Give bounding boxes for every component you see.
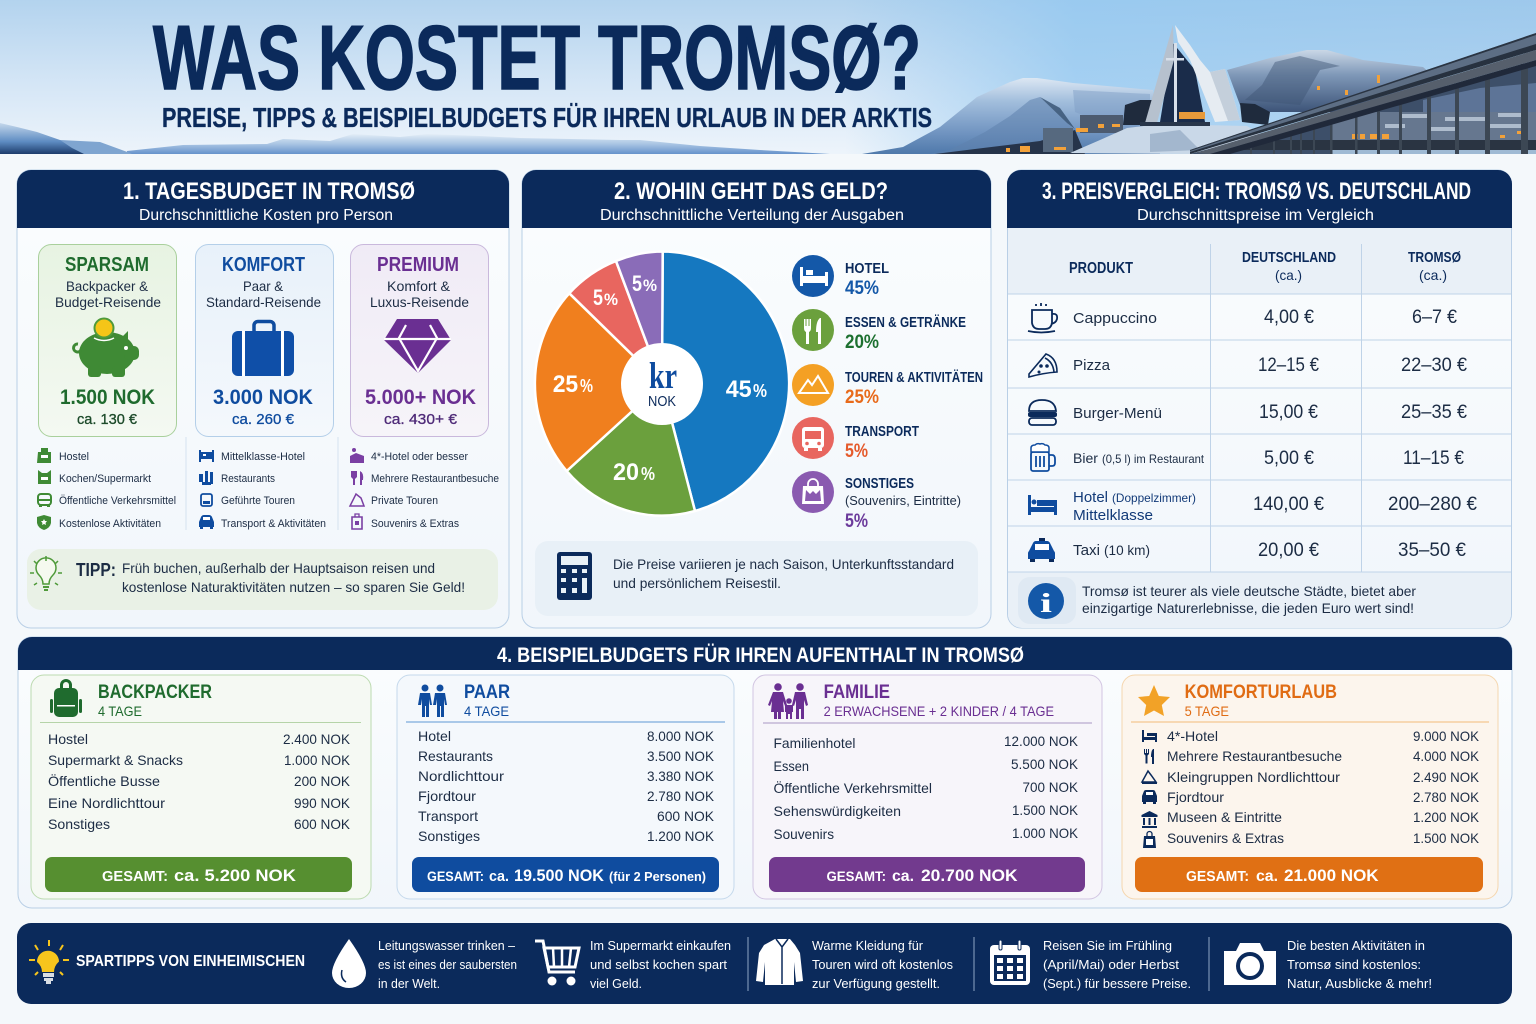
- legend: Essen: [792, 309, 966, 353]
- icon: bridge: [1190, 33, 1536, 154]
- card: Paar: Hotel: [418, 728, 451, 744]
- total: Familie: ca.: [892, 868, 914, 885]
- row: Hotel: 140,00 €: [1253, 494, 1324, 515]
- pie chart: NOK: [648, 394, 676, 410]
- tip: Supermarkt: Im Supermarkt einkaufen: [590, 938, 731, 953]
- left mountains: [0, 123, 830, 154]
- legend: Hotel: HOTEL: [845, 261, 889, 277]
- legend: Transport: TRANSPORT: [845, 424, 919, 440]
- card: Premium: Komfort &: [387, 278, 451, 294]
- callout: Preishinweis: und persönlichem Reisestil.: [613, 575, 781, 591]
- footer: Spartipps: [17, 923, 1512, 1004]
- tip: Reisezeit: (Sept.) für bessere Preise.: [1043, 976, 1191, 991]
- card: Familie: 700 NOK: [1022, 779, 1079, 795]
- card: Premium: PREMIUM: [377, 254, 459, 276]
- card: Premium: ca. 430+ €: [384, 411, 458, 428]
- card: Backpacker: 2.400 NOK: [283, 731, 351, 747]
- icon: water drop: [332, 939, 366, 988]
- card: Familie: Souvenirs: [774, 826, 834, 842]
- pie chart: %: [643, 276, 657, 295]
- title: WAS KOSTET TROMSØ?: [153, 8, 921, 109]
- card: Komfort: KOMFORT: [222, 254, 305, 276]
- subtitle: PREISE, TIPPS & BEISPIELBUDGETS FÜR IHREN URLAUB IN DER ARKTIS: [162, 102, 932, 133]
- tip: Aktivitäten: Die besten Aktivitäten in: [1287, 938, 1425, 953]
- icons: Komforturlaub rows: [1142, 730, 1158, 848]
- total: Komforturlaub: 21.000 NOK: [1284, 866, 1379, 885]
- total: Komforturlaub: ca.: [1256, 868, 1278, 885]
- callout: Info: [1018, 577, 1416, 624]
- card: Komforturlaub: Mehrere Restaurantbesuche: [1167, 748, 1342, 764]
- pie chart: [535, 252, 789, 516]
- legend: Transport: 5%: [845, 441, 868, 462]
- callout: Info: einzigartige Naturerlebnisse, die jeden Euro wert sind!: [1082, 600, 1414, 616]
- card: Komforturlaub: Kleingruppen Nordlichttour: [1167, 769, 1340, 785]
- card: Sparsam: Budget-Reisende: [55, 294, 161, 310]
- row: Pizza: Pizza: [1073, 357, 1111, 374]
- row: Taxi: 20,00 €: [1258, 540, 1319, 561]
- tip: Supermarkt: [535, 938, 731, 991]
- card: Komforturlaub: Museen & Eintritte: [1167, 809, 1282, 825]
- list: Premium: 4*-Hotel oder besser: [371, 451, 468, 463]
- card: Komforturlaub: Souvenirs & Extras: [1167, 830, 1284, 846]
- card: Backpacker: 200 NOK: [294, 773, 351, 789]
- legend: Sonstiges: 5%: [845, 511, 868, 532]
- row: Taxi: 35–50 €: [1398, 540, 1466, 561]
- icon: family: [768, 683, 808, 719]
- pie chart: %: [604, 290, 618, 309]
- callout: Tipp: [27, 549, 498, 610]
- icons: Premium list: [350, 448, 364, 529]
- card: Komforturlaub: 4*-Hotel: [1167, 728, 1218, 744]
- card: Paar: 2.780 NOK: [647, 788, 715, 804]
- tip: Reisezeit: (April/Mai) oder Herbst: [1043, 957, 1179, 972]
- card: Paar: [397, 675, 734, 899]
- row: Hotel: [1028, 489, 1477, 524]
- list: Sparsam: Kostenlose Aktivitäten: [59, 518, 161, 530]
- panel: Ausgabenverteilung: [522, 170, 991, 628]
- card: Premium: 5.000+ NOK: [365, 386, 476, 409]
- header banner: [0, 0, 1536, 154]
- icon: arctic cathedral: [1070, 25, 1270, 154]
- card: Komforturlaub: 2.490 NOK: [1413, 769, 1480, 785]
- card: Komfort: Paar &: [243, 278, 284, 294]
- panel: Preisvergleich: [1007, 170, 1512, 628]
- callout: Tipp: kostenlose Naturaktivitäten nutzen – so sparen Sie Geld!: [122, 579, 465, 595]
- row: Taxi: Taxi: [1073, 542, 1100, 559]
- card: Backpacker: 600 NOK: [294, 816, 351, 832]
- total: Paar: GESAMT:: [427, 868, 484, 884]
- card: Backpacker: 4 TAGE: [98, 703, 142, 719]
- row: Cappuccino: [1028, 303, 1457, 332]
- list: Komfort: Geführte Touren: [221, 495, 295, 507]
- row: Hotel: Mittelklasse: [1073, 507, 1153, 524]
- pie chart: 5: [632, 271, 642, 296]
- tip: Warme Kleidung: zur Verfügung gestellt.: [812, 976, 940, 991]
- pie chart: %: [753, 381, 767, 401]
- list: Komfort: Mittelklasse-Hotel: [221, 451, 305, 463]
- card: Backpacker: Sonstiges: [48, 816, 110, 832]
- row: Taxi: (10 km): [1104, 543, 1150, 558]
- callout: Tipp: TIPP:: [76, 560, 116, 580]
- card: Komforturlaub: 5 TAGE: [1185, 703, 1229, 719]
- row: Hotel: Hotel: [1073, 489, 1108, 506]
- total: Paar: ca.: [489, 868, 509, 885]
- card: Backpacker: 990 NOK: [294, 795, 351, 811]
- subheading: Durchschnittliche Kosten pro Person: [139, 207, 393, 224]
- card: Backpacker: Hostel: [48, 731, 88, 747]
- icon: town lights: [935, 100, 1152, 154]
- table header: PRODUKT: [1069, 260, 1133, 277]
- pie chart: 45: [726, 376, 752, 403]
- table: price comparison: [1008, 244, 1511, 572]
- callout: Preishinweis: Die Preise variieren je nach Saison, Unterkunftsstandard: [613, 556, 954, 572]
- total: Familie: GESAMT:: [826, 868, 886, 884]
- callout: Preishinweis: [535, 541, 978, 616]
- card: Komforturlaub: 4.000 NOK: [1413, 748, 1480, 764]
- list: Sparsam: Öffentliche Verkehrsmittel: [59, 495, 176, 507]
- card: Komforturlaub: Fjordtour: [1167, 789, 1224, 805]
- pie chart: kr: [649, 356, 677, 397]
- pie chart: 25: [553, 371, 578, 398]
- card: Familie: Sehenswürdigkeiten: [774, 803, 901, 819]
- card: Backpacker: 1.000 NOK: [284, 752, 351, 768]
- card: Komfort: 3.000 NOK: [213, 386, 313, 409]
- icon: suitcase: [232, 322, 294, 376]
- card: Komforturlaub: [1122, 675, 1498, 899]
- pie chart: %: [641, 464, 655, 484]
- table header: (ca.): [1419, 267, 1447, 283]
- row: Bier: 11–15 €: [1403, 448, 1464, 469]
- card: Familie: 12.000 NOK: [1004, 733, 1079, 749]
- icon: camera: [1224, 943, 1276, 985]
- card: Backpacker: BACKPACKER: [98, 681, 212, 703]
- row: Bier: 5,00 €: [1264, 448, 1314, 469]
- card: Paar: Restaurants: [418, 748, 493, 764]
- legend: Essen: ESSEN & GETRÄNKE: [845, 314, 966, 331]
- card: Sparsam: [38, 244, 176, 436]
- icon: light bulb: [30, 556, 62, 590]
- total: Backpacker: GESAMT:: [102, 869, 168, 885]
- tip: Reisezeit: Reisen Sie im Frühling: [1043, 938, 1172, 953]
- legend: Essen: 20%: [845, 332, 879, 353]
- card: Familie: [753, 675, 1102, 899]
- card: Familie: 1.500 NOK: [1012, 802, 1079, 818]
- card: Komforturlaub: 1.500 NOK: [1413, 830, 1480, 846]
- card: Paar: Sonstiges: [418, 828, 480, 844]
- icons: Sparsam list: [37, 448, 51, 530]
- icon: calculator: [557, 552, 592, 600]
- icon: couple: [418, 684, 447, 717]
- row: Burger: 15,00 €: [1259, 402, 1318, 423]
- legend: Touren: [792, 364, 983, 408]
- tip: Warme Kleidung: Touren wird oft kostenlos: [812, 957, 953, 972]
- legend: Hotel: [792, 255, 889, 299]
- heading: Wohin geht das Geld: 2. WOHIN GEHT DAS GELD?: [614, 178, 888, 205]
- card: Familie: Essen: [774, 758, 809, 774]
- row: Pizza: 22–30 €: [1401, 355, 1467, 376]
- card: Komfort: ca. 260 €: [232, 411, 295, 428]
- row: Pizza: [1029, 354, 1467, 377]
- card: Premium: [350, 244, 488, 436]
- total: Backpacker: [45, 857, 352, 892]
- list: Premium: Private Touren: [371, 495, 438, 507]
- list: Sparsam: Hostel: [59, 451, 89, 463]
- tip: Aktivitäten: Natur, Ausblicke & mehr!: [1287, 976, 1432, 991]
- subheading: Durchschnittliche Verteilung der Ausgaben: [600, 207, 904, 224]
- icon: info: i: [1040, 588, 1053, 618]
- card: Backpacker: Eine Nordlichttour: [48, 795, 165, 811]
- card: Sparsam: 1.500 NOK: [60, 386, 155, 409]
- callout: Tipp: Früh buchen, außerhalb der Hauptsaison reisen und: [122, 560, 435, 576]
- row: Burger: 25–35 €: [1401, 402, 1467, 423]
- table header: [1069, 249, 1461, 283]
- tip: Supermarkt: und selbst kochen spart: [590, 957, 727, 972]
- card: Familie: 5.500 NOK: [1011, 756, 1079, 772]
- card: Sparsam: Backpacker &: [66, 278, 149, 294]
- row: Cappuccino: 6–7 €: [1412, 307, 1457, 328]
- icon: bulb: [29, 940, 69, 984]
- icon: diamond: [384, 319, 451, 373]
- tip: Leitungswasser: es ist eines der saubersten: [378, 957, 517, 972]
- pie chart: 20: [613, 459, 639, 486]
- row: Cappuccino: Cappuccino: [1073, 310, 1157, 327]
- row: Bier: (0,5 l) im Restaurant: [1102, 452, 1205, 466]
- list: Sparsam: Kochen/Supermarkt: [59, 473, 151, 485]
- icon: info: [1028, 583, 1064, 619]
- card: Paar: Transport: [418, 808, 478, 824]
- icons: Komfort list: [199, 450, 214, 529]
- legend: Sonstiges: (Souvenirs, Eintritte): [845, 493, 961, 508]
- row: Hotel: (Doppelzimmer): [1112, 491, 1196, 505]
- row: Pizza: 12–15 €: [1258, 355, 1319, 376]
- total: Komforturlaub: [1135, 857, 1483, 892]
- icon: backpack: [50, 679, 82, 717]
- tip: Aktivitäten: Tromsø sind kostenlos:: [1287, 957, 1421, 972]
- card: Paar: 1.200 NOK: [647, 828, 715, 844]
- icon: shopping cart: [535, 941, 579, 986]
- card: Familie: FAMILIE: [824, 681, 890, 703]
- legend: Sonstiges: [792, 471, 961, 532]
- row: Bier: [1031, 444, 1464, 471]
- icon: calendar: [990, 940, 1030, 985]
- table header: (ca.): [1275, 267, 1302, 283]
- pie chart: %: [580, 376, 593, 396]
- footer: Spartipps: SPARTIPPS VON EINHEIMISCHEN: [76, 953, 305, 970]
- card: Sparsam: ca. 130 €: [77, 411, 138, 428]
- list: Premium: Souvenirs & Extras: [371, 518, 459, 530]
- card: Komforturlaub: 9.000 NOK: [1413, 728, 1480, 744]
- list: Premium: Mehrere Restaurantbesuche: [371, 473, 499, 485]
- right mountains: [862, 50, 1450, 154]
- table header: DEUTSCHLAND: [1242, 249, 1336, 266]
- row: Burger: [1028, 400, 1467, 425]
- card: Paar: PAAR: [464, 681, 510, 703]
- total: Backpacker: ca. 5.200 NOK: [174, 866, 297, 885]
- heading: Tagesbudget: 1. TAGESBUDGET IN TROMSØ: [123, 178, 415, 205]
- card: Familie: Öffentliche Verkehrsmittel: [774, 779, 932, 796]
- total: Familie: [769, 857, 1085, 892]
- card: Familie: 2 ERWACHSENE + 2 KINDER / 4 TAGE: [824, 703, 1054, 719]
- icon: star: [1138, 685, 1170, 716]
- card: Premium: Luxus-Reisende: [370, 294, 469, 310]
- total: Paar: 19.500 NOK: [514, 866, 605, 885]
- card: Paar: 600 NOK: [657, 808, 715, 824]
- card: Komforturlaub: 1.200 NOK: [1413, 809, 1480, 825]
- card: Backpacker: Supermarkt & Snacks: [48, 752, 183, 768]
- subheading: Durchschnittspreise im Vergleich: [1137, 207, 1374, 224]
- panel: Tagesbudget: [17, 170, 509, 628]
- callout: Info: Tromsø ist teurer als viele deutsche Städte, bietet aber: [1082, 583, 1416, 599]
- card: Familie: 1.000 NOK: [1012, 825, 1079, 841]
- card: Paar: 4 TAGE: [464, 703, 509, 719]
- total: Paar: [412, 857, 719, 892]
- legend: Touren: TOUREN & AKTIVITÄTEN: [845, 369, 983, 386]
- tip: Supermarkt: viel Geld.: [590, 976, 642, 991]
- total: Komforturlaub: GESAMT:: [1186, 869, 1249, 885]
- list: Komfort: [199, 450, 326, 530]
- card: Paar: 3.380 NOK: [647, 768, 715, 784]
- card: Komforturlaub: 2.780 NOK: [1413, 789, 1480, 805]
- tip: Leitungswasser: [332, 938, 517, 991]
- total: Paar: (für 2 Personen): [609, 869, 706, 884]
- row: Bier: Bier: [1073, 450, 1098, 466]
- card: Backpacker: [31, 675, 371, 899]
- card: Paar: 3.500 NOK: [647, 748, 715, 764]
- tip: Warme Kleidung: Warme Kleidung für: [812, 938, 924, 953]
- card: Sparsam: SPARSAM: [65, 254, 149, 276]
- row: Burger: Burger-Menü: [1073, 405, 1162, 422]
- total: Familie: 20.700 NOK: [921, 866, 1018, 885]
- legend: Transport: [792, 417, 919, 462]
- card: Komfort: Standard-Reisende: [206, 294, 321, 310]
- list: Premium: [350, 448, 499, 530]
- row: Hotel: 200–280 €: [1388, 494, 1477, 515]
- legend: Touren: 25%: [845, 387, 879, 408]
- list: Sparsam: [37, 448, 176, 530]
- tip: Aktivitäten: [1224, 938, 1432, 991]
- pie chart: 5: [593, 285, 603, 310]
- card: Paar: Fjordtour: [418, 788, 476, 804]
- tip: Leitungswasser: Leitungswasser trinken –: [378, 938, 516, 953]
- legend: Hotel: 45%: [845, 278, 879, 299]
- heading: Beispielbudgets: 4. BEISPIELBUDGETS FÜR IHREN AUFENTHALT IN TROMSØ: [497, 642, 1024, 667]
- tip: Warme Kleidung: [756, 938, 953, 991]
- icon: piggy bank: [74, 318, 139, 377]
- card: Komforturlaub: KOMFORTURLAUB: [1185, 681, 1337, 703]
- legend: Sonstiges: SONSTIGES: [845, 476, 914, 492]
- list: Komfort: Restaurants: [221, 473, 275, 485]
- panel: Beispielbudgets: [18, 637, 1512, 908]
- card: Familie: Familienhotel: [774, 735, 856, 751]
- row: Cappuccino: 4,00 €: [1264, 307, 1314, 328]
- card: Backpacker: Öffentliche Busse: [48, 772, 160, 789]
- tip: Reisezeit: [990, 938, 1191, 991]
- table header: TROMSØ: [1408, 249, 1461, 266]
- list: Komfort: Transport & Aktivitäten: [221, 518, 326, 530]
- icon: jacket: [756, 939, 803, 985]
- card: Paar: 8.000 NOK: [647, 728, 715, 744]
- row: Taxi: [1028, 538, 1466, 562]
- tip: Leitungswasser: in der Welt.: [378, 976, 440, 991]
- card: Paar: Nordlichttour: [418, 768, 504, 784]
- card: Komfort: [196, 244, 334, 436]
